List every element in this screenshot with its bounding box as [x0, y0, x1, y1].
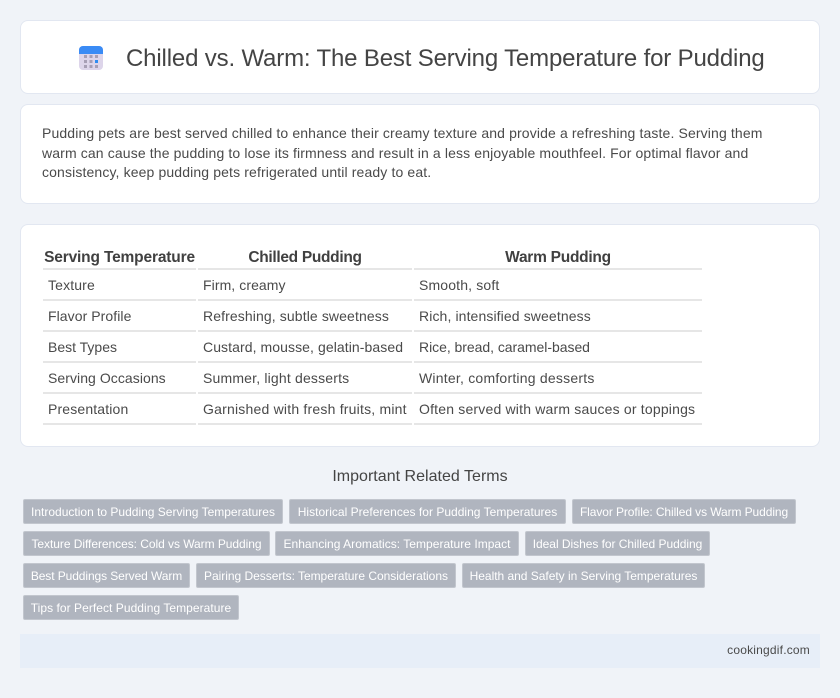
tag: Introduction to Pudding Serving Temperatures [31, 505, 275, 519]
tag: Best Puddings Served Warm [31, 569, 182, 583]
footer bar [20, 634, 820, 668]
text block: introduction: warm can cause the pudding to lose its firmness and result in a less enjoyable mouthfeel. For optimal flavor and [42, 145, 748, 161]
comparison table: Winter, comforting desserts [419, 370, 595, 386]
text block: introduction [42, 125, 763, 180]
comparison table: Chilled Pudding [248, 248, 362, 266]
comparison table: Serving Occasions [48, 370, 166, 386]
tag: Tips for Perfect Pudding Temperature [31, 601, 231, 615]
tag [196, 563, 456, 588]
tag [525, 531, 710, 556]
comparison table: Best Types [48, 339, 117, 355]
comparison table: Smooth, soft [419, 277, 499, 293]
tag [275, 531, 519, 556]
comparison table: Flavor Profile [48, 308, 131, 324]
comparison table: Warm Pudding [505, 248, 611, 266]
comparison table [43, 248, 702, 425]
comparison table: Texture [48, 277, 95, 293]
panel: header [20, 20, 820, 94]
panel: introduction [20, 104, 820, 204]
comparison table: Custard, mousse, gelatin-based [203, 339, 403, 355]
tag: Ideal Dishes for Chilled Pudding [533, 537, 702, 551]
comparison table: Rice, bread, caramel-based [419, 339, 590, 355]
comparison table: Firm, creamy [203, 277, 286, 293]
footer: source credit: cookingdif.com [727, 643, 810, 657]
title: Chilled vs. Warm: The Best Serving Temperature for Pudding [126, 45, 765, 72]
comparison table: Often served with warm sauces or toppings [419, 401, 695, 417]
tag: Historical Preferences for Pudding Temperatures [298, 505, 557, 519]
heading: related terms: Important Related Terms [332, 468, 508, 485]
text block: introduction: Pudding pets are best served chilled to enhance their creamy texture and provide a refreshing taste. Serving them [42, 125, 763, 141]
comparison table: Serving Temperature [44, 248, 195, 266]
tag: Texture Differences: Cold vs Warm Pudding [31, 537, 262, 551]
tag [23, 595, 239, 620]
tag [23, 499, 283, 524]
tag: Health and Safety in Serving Temperatures [470, 569, 697, 583]
tag: Enhancing Aromatics: Temperature Impact [283, 537, 511, 551]
tag [572, 499, 796, 524]
tag: Flavor Profile: Chilled vs Warm Pudding [580, 505, 788, 519]
tag [289, 499, 566, 524]
comparison table: Refreshing, subtle sweetness [203, 308, 389, 324]
comparison table: Presentation [48, 401, 128, 417]
comparison table: Summer, light desserts [203, 370, 349, 386]
tag [23, 531, 270, 556]
comparison table: Rich, intensified sweetness [419, 308, 591, 324]
tag [462, 563, 705, 588]
tag: Pairing Desserts: Temperature Considerations [204, 569, 448, 583]
panel: comparison table [20, 224, 820, 447]
icon: calendar [79, 46, 103, 70]
tag [23, 563, 190, 588]
text block: introduction: consistency, keep pudding pets refrigerated until ready to eat. [42, 164, 431, 180]
comparison table: Garnished with fresh fruits, mint [203, 401, 407, 417]
